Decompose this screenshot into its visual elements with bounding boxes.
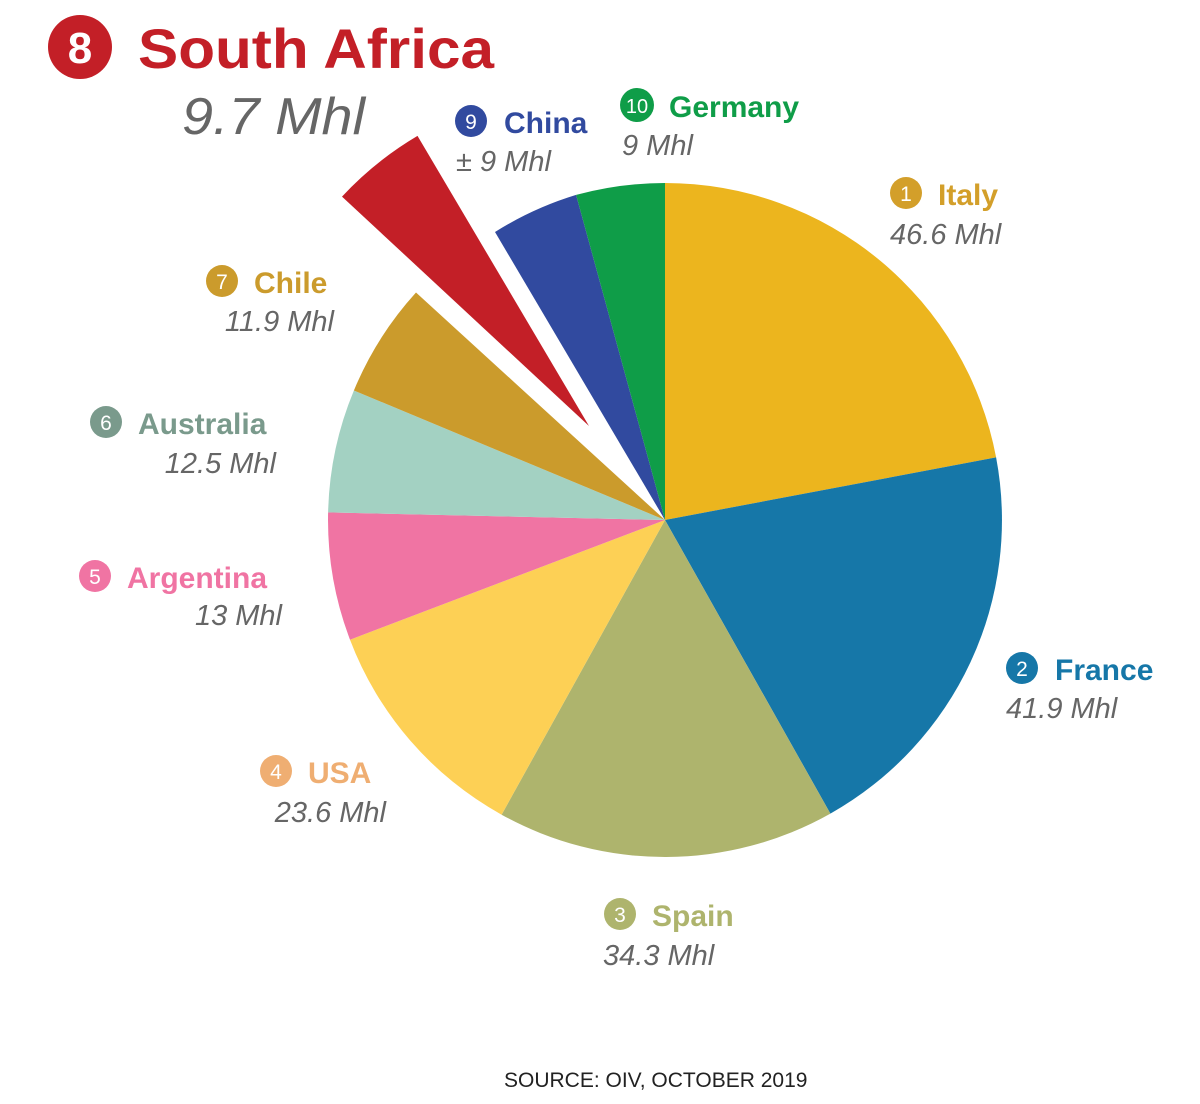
label: USA: 23.6 Mhl: [274, 797, 388, 829]
label: Italy: 46.6 Mhl: [890, 219, 1003, 251]
label: Italy: 1: [900, 183, 912, 206]
label: Australia: [90, 406, 278, 480]
label: Spain: [603, 898, 734, 972]
label: Australia: Australia: [138, 408, 267, 441]
label: Spain: 3: [614, 904, 626, 927]
label: Italy: Italy: [938, 179, 998, 212]
label: Argentina: 13 Mhl: [195, 600, 284, 632]
source note: SOURCE: OIV, OCTOBER 2019: [504, 1069, 807, 1092]
label: Italy: [890, 177, 1003, 251]
label: Spain: 34.3 Mhl: [603, 940, 716, 972]
title: South Africa: South Africa: [138, 17, 495, 80]
label: France: 41.9 Mhl: [1006, 693, 1119, 725]
title: South Africa: 9.7 Mhl: [182, 88, 367, 146]
label: USA: USA: [308, 757, 371, 790]
slice: USA: [350, 520, 665, 815]
slice: South Africa (exploded): [342, 136, 589, 426]
label: China: 9: [465, 111, 477, 134]
label: Argentina: [79, 560, 284, 632]
label: Spain: Spain: [652, 900, 734, 933]
label: Chile: Chile: [254, 267, 327, 300]
label: Chile: [206, 265, 336, 338]
label: Chile: 7: [216, 271, 228, 294]
label: Germany: 9 Mhl: [622, 130, 694, 162]
label: France: [1006, 652, 1153, 725]
slice: Chile: [354, 292, 665, 520]
title: South Africa: [48, 15, 495, 146]
label: Germany: Germany: [669, 91, 799, 124]
label: France: 2: [1016, 658, 1028, 681]
label: Argentina: 5: [89, 566, 101, 589]
slice: China: [495, 195, 665, 520]
label: Chile: 11.9 Mhl: [225, 306, 336, 338]
label: Australia: 6: [100, 412, 112, 435]
label: China: China: [504, 107, 588, 140]
slice: Germany: [576, 183, 665, 520]
label: France: France: [1055, 654, 1153, 687]
label: Argentina: Argentina: [127, 562, 267, 595]
slice: Argentina: [328, 512, 665, 640]
label: China: ± 9 Mhl: [456, 146, 552, 178]
slice: France: [665, 457, 1002, 814]
slice: Italy: [665, 183, 996, 520]
slice: Spain: [502, 520, 830, 857]
label: Germany: [620, 88, 799, 162]
slice: Australia: [328, 390, 665, 520]
label: USA: [260, 755, 388, 829]
label: Australia: 12.5 Mhl: [165, 448, 278, 480]
label: China: [455, 105, 588, 178]
title: South Africa: 8: [68, 24, 92, 73]
label: Germany: 10: [626, 96, 648, 118]
label: USA: 4: [270, 761, 282, 784]
pie chart: [328, 136, 1002, 857]
